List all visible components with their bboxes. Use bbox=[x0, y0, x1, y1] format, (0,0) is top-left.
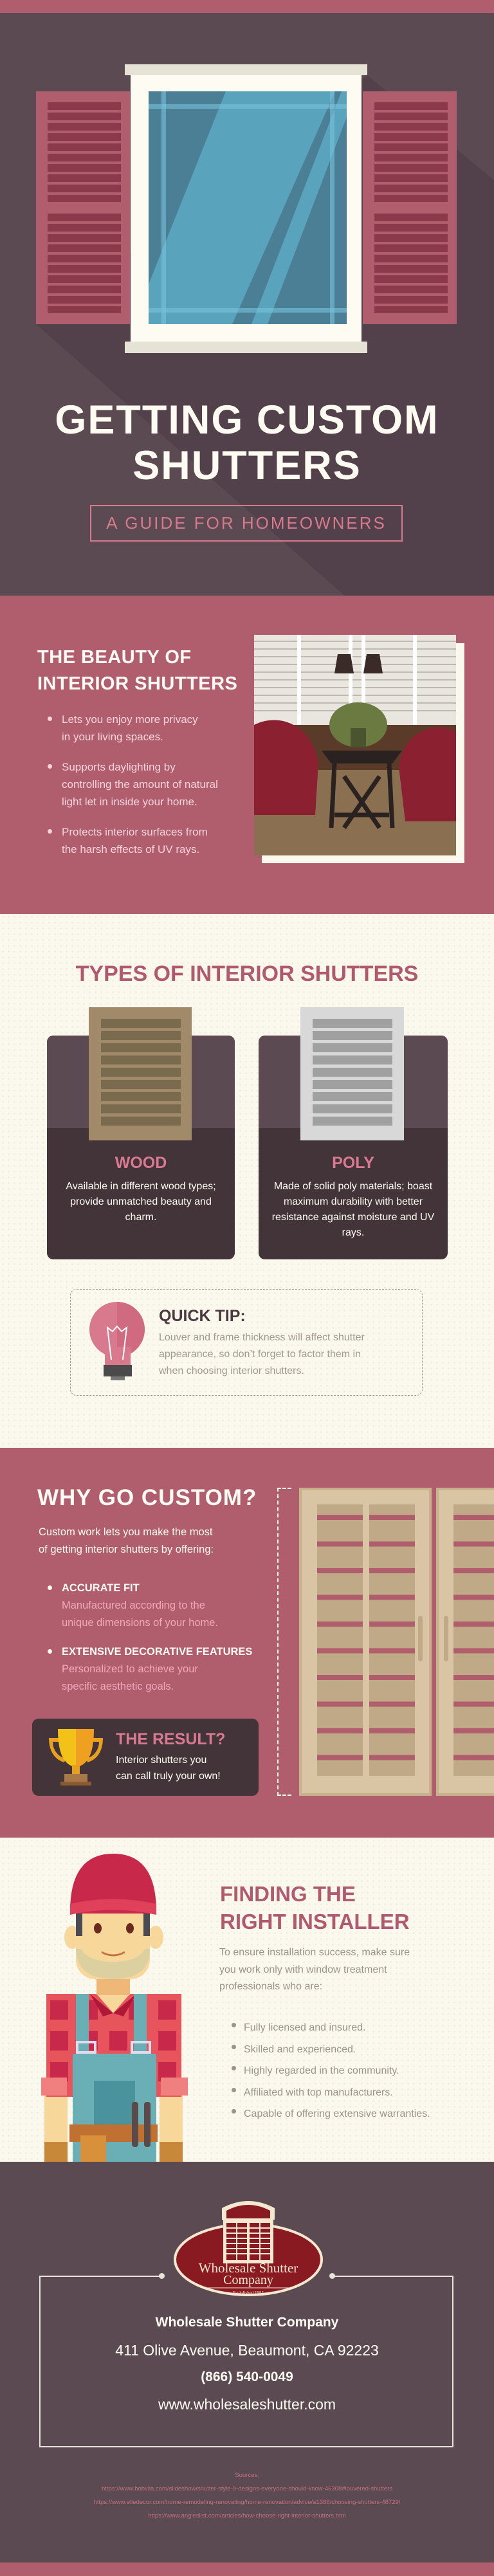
bullet list: ACCURATE FIT bbox=[62, 1582, 140, 1594]
checklist: Skilled and experienced. bbox=[244, 2044, 356, 2054]
callout: the result: can call truly your own! bbox=[116, 1771, 221, 1782]
company details: www.wholesaleshutter.com bbox=[158, 2396, 336, 2413]
icon: dashed bracket bbox=[277, 1488, 291, 1796]
card: wood bbox=[47, 1007, 235, 1259]
card: wood: WOOD bbox=[115, 1154, 167, 1172]
bullet list: Lets you enjoy more privacy bbox=[62, 713, 198, 726]
company details: Wholesale Shutter Company bbox=[156, 2315, 338, 2330]
heading: WHY GO CUSTOM? bbox=[37, 1485, 257, 1510]
subtitle box bbox=[90, 505, 403, 542]
title bbox=[55, 397, 439, 488]
callout: the result: THE RESULT? bbox=[116, 1730, 225, 1748]
bullet list: Personalized to achieve your bbox=[62, 1663, 198, 1675]
heading: THE BEAUTY OF bbox=[37, 647, 192, 668]
sources: Sources: bbox=[235, 2472, 259, 2479]
company details: (866) 540-0049 bbox=[201, 2370, 293, 2384]
sources bbox=[94, 2472, 400, 2519]
left shutter bbox=[36, 91, 130, 324]
intro text bbox=[219, 1947, 410, 1992]
logo: Established 1985 bbox=[233, 2290, 264, 2296]
bullet list bbox=[48, 713, 218, 855]
intro text: you work only with window treatment bbox=[219, 1964, 387, 1975]
subtitle box: A GUIDE FOR HOMEOWNERS bbox=[106, 513, 387, 533]
checklist bbox=[232, 2022, 430, 2119]
bullet list: EXTENSIVE DECORATIVE FEATURES bbox=[62, 1646, 252, 1658]
heading bbox=[37, 647, 237, 694]
icon: shutter doors bbox=[299, 1488, 494, 1796]
bullet list: light let in inside your home. bbox=[62, 796, 197, 808]
card: poly: POLY bbox=[332, 1154, 374, 1172]
panel: beauty of interior shutters bbox=[0, 598, 494, 914]
icon: worker illustration bbox=[41, 1854, 188, 2162]
photo bbox=[254, 635, 464, 863]
company details: 411 Olive Avenue, Beaumont, CA 92223 bbox=[115, 2342, 379, 2359]
bullet list: controlling the amount of natural bbox=[62, 778, 218, 790]
contact box bbox=[39, 2276, 453, 2447]
title: GETTING CUSTOM bbox=[55, 397, 439, 443]
icon: wood shutter bbox=[89, 1007, 192, 1140]
panel: finding the right installer bbox=[0, 1838, 494, 2162]
bullet list: the harsh effects of UV rays. bbox=[62, 843, 199, 855]
long shadow bbox=[36, 76, 494, 596]
card: poly: Made of solid poly materials; boast maximum durability with better resistance against moisture and UV rays. bbox=[272, 1181, 434, 1238]
checklist: Capable of offering extensive warranties. bbox=[244, 2108, 430, 2119]
title: SHUTTERS bbox=[133, 443, 361, 488]
intro text bbox=[39, 1526, 214, 1555]
card: poly bbox=[259, 1007, 448, 1259]
panel: why go custom bbox=[0, 1448, 494, 1838]
checklist: Highly regarded in the community. bbox=[244, 2065, 399, 2076]
icon: window with shutters bbox=[36, 64, 457, 353]
sources: https://www.angieslist.com/articles/how-choose-right-interior-shutters.htm bbox=[148, 2512, 346, 2519]
heading: TYPES OF INTERIOR SHUTTERS bbox=[76, 962, 418, 986]
hero section bbox=[0, 0, 494, 598]
bullet list bbox=[48, 1582, 252, 1692]
callout: quick tip: QUICK TIP: bbox=[159, 1307, 246, 1325]
bullet list: in your living spaces. bbox=[62, 731, 163, 743]
callout: quick tip: Louver and frame thickness will affect shutter bbox=[159, 1332, 365, 1343]
bullet list: unique dimensions of your home. bbox=[62, 1617, 218, 1629]
bullet list: Protects interior surfaces from bbox=[62, 826, 208, 838]
heading: FINDING THE bbox=[220, 1882, 356, 1906]
company details bbox=[115, 2315, 379, 2413]
heading bbox=[220, 1882, 410, 1933]
intro text: To ensure installation success, make sure bbox=[219, 1947, 410, 1958]
right shutter bbox=[363, 91, 457, 324]
intro text: professionals who are: bbox=[219, 1981, 322, 1992]
intro text: Custom work lets you make the most bbox=[39, 1526, 213, 1538]
checklist: Affiliated with top manufacturers. bbox=[244, 2087, 393, 2098]
callout: the result bbox=[32, 1719, 259, 1796]
logo bbox=[174, 2201, 323, 2296]
panel: footer contact bbox=[0, 2162, 494, 2576]
bullet list: specific aesthetic goals. bbox=[62, 1681, 174, 1692]
heading: INTERIOR SHUTTERS bbox=[37, 673, 237, 694]
intro text: of getting interior shutters by offering: bbox=[39, 1544, 214, 1555]
icon: poly shutter bbox=[300, 1007, 404, 1140]
callout: the result: Interior shutters you bbox=[116, 1755, 206, 1766]
icon: light bulb bbox=[89, 1302, 145, 1380]
logo: Company bbox=[223, 2273, 273, 2287]
heading: RIGHT INSTALLER bbox=[220, 1910, 410, 1933]
card: wood: Available in different wood types; provide unmatched beauty and charm. bbox=[66, 1181, 216, 1223]
callout: quick tip: appearance, so don’t forget to factor them in bbox=[159, 1349, 361, 1360]
callout: quick tip: when choosing interior shutters. bbox=[159, 1366, 304, 1376]
logo: Wholesale Shutter bbox=[199, 2260, 298, 2276]
bullet list: Manufactured according to the bbox=[62, 1600, 205, 1611]
sources: https://www.bobvila.com/slideshow/shutter-style-9-designs-everyone-should-know-46308#louvered-shutters bbox=[102, 2485, 392, 2492]
icon: trophy bbox=[49, 1729, 103, 1786]
bullet list: Supports daylighting by bbox=[62, 761, 176, 773]
checklist: Fully licensed and insured. bbox=[244, 2022, 365, 2033]
panel: types of interior shutters bbox=[0, 914, 494, 1448]
sources: https://www.elledecor.com/home-remodeling-renovating/home-renovation/advice/a1386/choosing-shutters-48729/ bbox=[94, 2499, 400, 2506]
callout: quick tip bbox=[70, 1289, 423, 1396]
